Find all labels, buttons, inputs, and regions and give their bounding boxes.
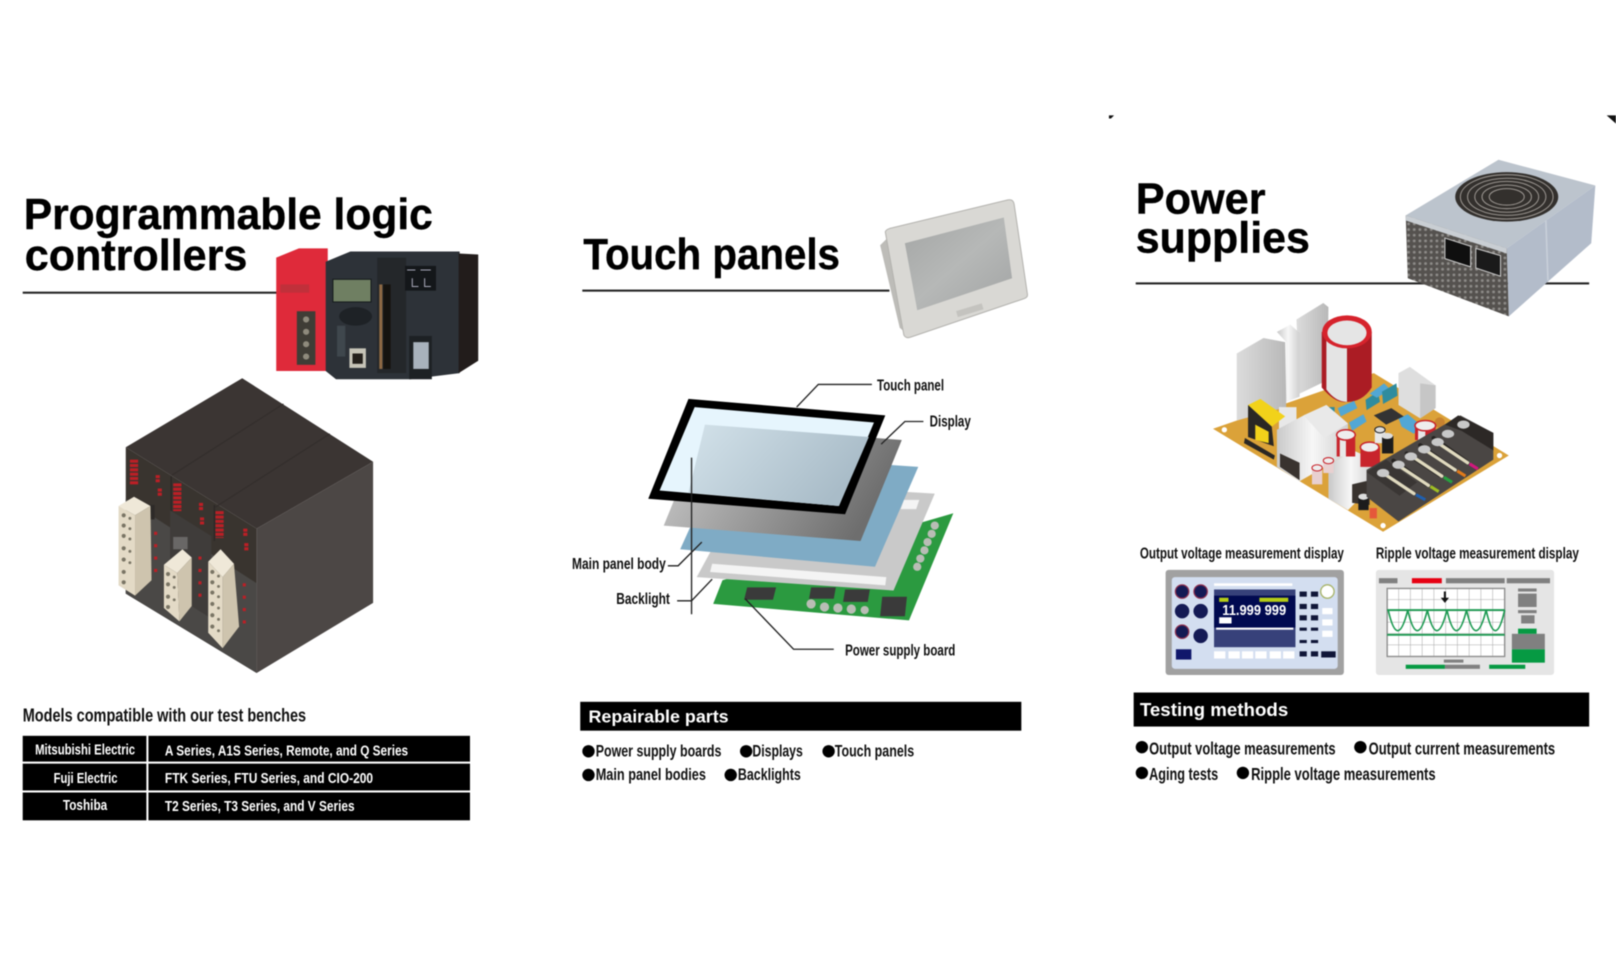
photo: power supply unit bbox=[1406, 160, 1595, 316]
heading: programmable logic controllers: Programmable logic bbox=[24, 191, 433, 239]
caption: output voltage display: Output voltage measurement display bbox=[1140, 546, 1344, 563]
list: repairable parts bbox=[582, 742, 914, 784]
list: testing methods: Output current measurements bbox=[1369, 738, 1555, 758]
table: compatible models: FTK Series, FTU Series, and CIO-200 bbox=[165, 771, 373, 787]
list: testing methods: Aging tests bbox=[1149, 764, 1218, 784]
electrolytic capacitors bbox=[1312, 420, 1436, 518]
connector blocks bbox=[119, 497, 239, 648]
white blocks bbox=[1277, 405, 1348, 481]
illustration: power supply circuit board bbox=[1213, 303, 1509, 532]
heading: power supplies: supplies bbox=[1136, 214, 1310, 262]
list: testing methods: Output voltage measurements bbox=[1149, 738, 1336, 758]
list: testing methods: Ripple voltage measurements bbox=[1251, 764, 1436, 784]
table: compatible models: Mitsubishi Electric bbox=[35, 742, 135, 758]
meter reading: 11.999 999 bbox=[1222, 603, 1286, 619]
board: power supply board bbox=[713, 513, 953, 620]
board base bbox=[1213, 373, 1509, 532]
table: compatible models: A Series, A1S Series, Remote, and Q Series bbox=[165, 743, 408, 759]
list: repairable parts: Touch panels bbox=[835, 742, 914, 760]
list: repairable parts: Displays bbox=[752, 742, 803, 760]
layer: main panel body bbox=[680, 453, 918, 567]
transformer bbox=[1244, 399, 1296, 460]
section bar: repairable parts: Repairable parts bbox=[588, 706, 729, 726]
layer: touch panel frame bbox=[648, 399, 885, 514]
table: compatible models bbox=[23, 736, 470, 820]
heading rule bbox=[1136, 282, 1589, 284]
panel: touch panels bbox=[572, 200, 1028, 784]
label: power supply board: Power supply board bbox=[845, 642, 955, 659]
photo: PLC unit bbox=[276, 248, 478, 379]
crop marks bbox=[1109, 115, 1616, 124]
section bar: testing methods: Testing methods bbox=[1140, 699, 1288, 720]
white connector bbox=[1399, 367, 1436, 418]
label: main panel body: Main panel body bbox=[572, 556, 666, 573]
photo: touch panel device bbox=[880, 200, 1028, 338]
heading rule bbox=[23, 292, 278, 294]
heat sinks bbox=[1237, 303, 1328, 420]
orange component bbox=[1435, 417, 1445, 428]
illustration: ripple voltage oscilloscope bbox=[1376, 570, 1554, 675]
section bar: repairable parts bbox=[580, 702, 1021, 731]
exploded touch panel diagram bbox=[572, 378, 971, 659]
layer: display bbox=[664, 425, 902, 541]
illustration: output voltage meter bbox=[1166, 570, 1344, 675]
illustration: modular PLC block bbox=[119, 378, 373, 673]
list: repairable parts: Backlights bbox=[738, 766, 801, 784]
caption: compatible models: Models compatible with our test benches bbox=[23, 704, 306, 725]
layer: backlight plate bbox=[697, 482, 935, 591]
heading: programmable logic controllers: controllers bbox=[25, 232, 247, 280]
label: backlight: Backlight bbox=[616, 591, 670, 608]
label: touch panel: Touch panel bbox=[877, 378, 944, 395]
leader lines bbox=[668, 384, 923, 649]
heading: programmable logic controllers bbox=[24, 191, 433, 280]
table: compatible models: Fuji Electric bbox=[54, 771, 118, 787]
list: repairable parts: Power supply boards bbox=[596, 742, 721, 760]
capacitor bbox=[1322, 315, 1372, 402]
list: testing methods bbox=[1136, 738, 1555, 784]
label: display: Display bbox=[930, 414, 971, 431]
table: compatible models: T2 Series, T3 Series, and V Series bbox=[165, 799, 355, 815]
heading: power supplies: Power bbox=[1136, 175, 1266, 223]
terminal block bbox=[1367, 415, 1493, 521]
panel: programmable logic controllers bbox=[23, 191, 478, 820]
small blue components bbox=[1327, 383, 1420, 434]
integrated circuit bbox=[1374, 408, 1404, 425]
table: compatible models: Toshiba bbox=[63, 798, 108, 814]
list: repairable parts: Main panel bodies bbox=[596, 766, 706, 784]
heading: touch panels: Touch panels bbox=[583, 231, 840, 279]
heading: power supplies bbox=[1136, 175, 1310, 262]
section bar: testing methods bbox=[1134, 693, 1589, 727]
heading rule bbox=[582, 290, 889, 292]
panel: power supplies bbox=[1134, 160, 1595, 784]
trigger arrow bbox=[1441, 592, 1449, 603]
